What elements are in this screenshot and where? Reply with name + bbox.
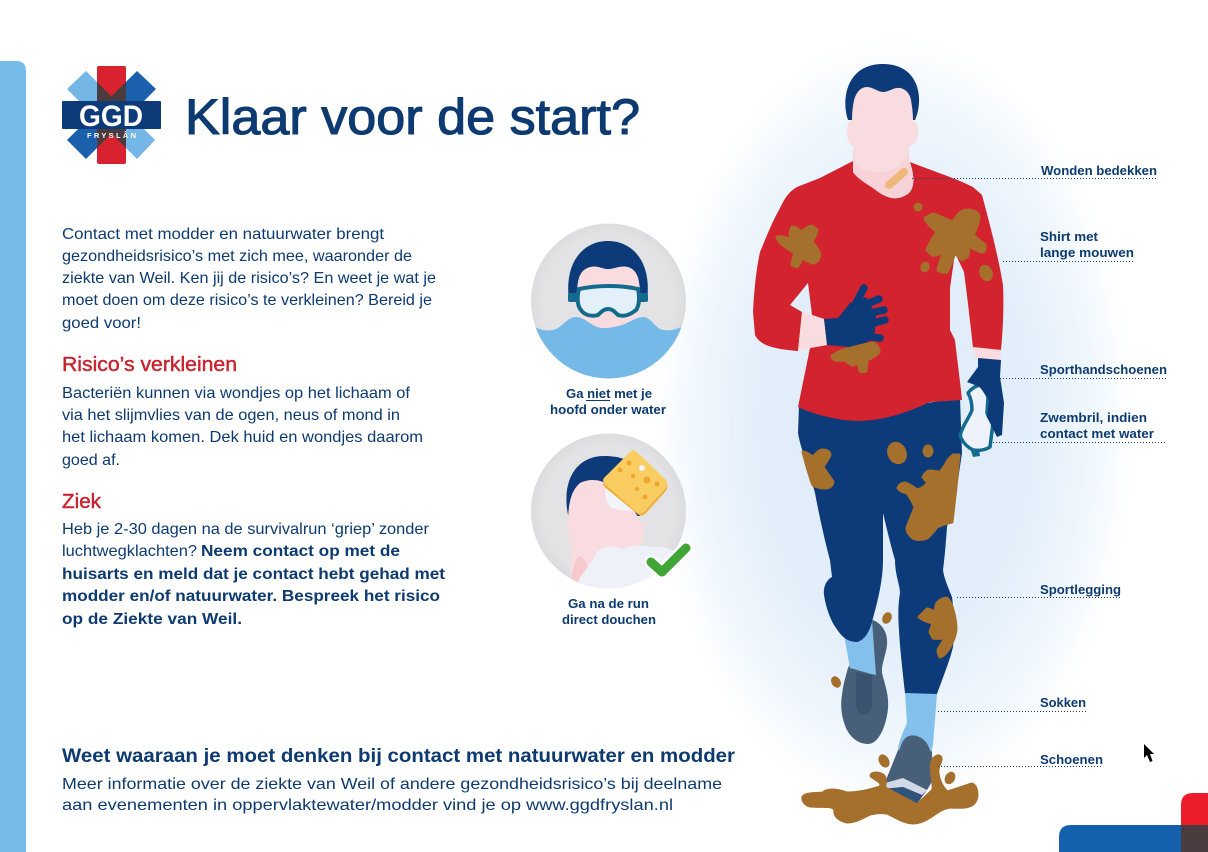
label: zwembril: contact met water [1040, 426, 1154, 441]
back sock [844, 620, 876, 675]
gloved hand [967, 358, 1004, 437]
logo: GGD Fryslan: GGD [79, 100, 143, 133]
label: shirt met lange mouwen: Shirt met [1040, 229, 1099, 244]
logo: GGD Fryslan: FRYSLÂN [87, 131, 136, 140]
label: zwembril: Zwembril, indien [1040, 410, 1147, 425]
bottom text block: Meer informatie over de ziekte van Weil of andere gezondheidsrisico’s bij deelname [62, 776, 722, 793]
shoe sole [882, 787, 922, 805]
back shoe [841, 620, 888, 744]
runner figure [753, 64, 1004, 823]
label: zwembril [990, 410, 1167, 442]
label: sokken: Sokken [1040, 695, 1086, 710]
caption: direct douchen [562, 596, 656, 627]
background glow behind runner [655, 35, 1135, 815]
bottom text block [62, 776, 722, 814]
mud on shirt [925, 210, 985, 272]
text block: risico's verkleinen [62, 385, 423, 469]
logo: GGD Fryslan [62, 66, 161, 164]
text block: ziek: op de Ziekte van Weil. [62, 611, 242, 628]
title: Klaar voor de start? [185, 89, 640, 145]
shirt torso and arms [753, 161, 1003, 421]
heading: risico's verkleinen: Risico’s verkleinen [62, 354, 237, 376]
swim goggles in hand [960, 385, 993, 450]
label: shirt met lange mouwen [1003, 229, 1134, 262]
caption: niet onder water: Ga niet met je [566, 386, 652, 401]
glove on chest [824, 288, 885, 347]
icon: showering head with sponge [531, 434, 690, 590]
text block: ziek [62, 521, 446, 628]
caption: direct douchen: direct douchen [562, 612, 656, 627]
text block: ziek: modder en/of natuurwater. Bespreek het risico [62, 588, 440, 605]
hair [845, 64, 919, 120]
plaster [889, 172, 904, 185]
intro text block: moet doen om deze risico’s te verkleinen? Bereid je [62, 292, 432, 309]
label: wonden bedekken: Wonden bedekken [1041, 163, 1157, 178]
neck [853, 150, 913, 198]
caption: niet onder water [550, 386, 666, 417]
intro text block: goed voor! [62, 315, 141, 332]
intro text block [62, 226, 436, 332]
caption: direct douchen: Ga na de run [568, 596, 649, 611]
text block: ziek: Heb je 2-30 dagen na de survivalrun ‘griep’ zonder [62, 521, 430, 538]
intro text block: ziekte van Weil. Ken jij de risico’s? En weet je wat je [62, 270, 436, 287]
label: schoenen: Schoenen [1040, 752, 1103, 767]
text block: ziek: huisarts en meld dat je contact hebt gehad met [62, 566, 446, 583]
skin cuffs [798, 312, 827, 351]
text block: ziek: Neem contact op met de [201, 543, 400, 560]
bottom text block: aan evenementen in oppervlaktewater/modder vind je op www.ggdfryslan.nl [62, 797, 673, 814]
label: shirt met lange mouwen: lange mouwen [1040, 245, 1134, 260]
label: sportlegging: Sportlegging [1040, 582, 1121, 597]
shoe stripe [882, 778, 927, 795]
text block: risico's verkleinen: goed af. [62, 452, 120, 469]
bottom heading: Weet waaraan je moet denken bij contact met natuurwater en modder [62, 745, 735, 767]
icon: mouse cursor [1144, 744, 1154, 762]
caption: niet onder water: hoofd onder water [550, 402, 666, 417]
corner blocks [1059, 793, 1208, 852]
text block: risico's verkleinen: het lichaam komen. Dek huid en wondjes daarom [62, 429, 423, 446]
front shoe [882, 735, 933, 804]
legging [798, 398, 962, 694]
front sock [898, 692, 937, 752]
intro text block: gezondheidsrisico’s met zich mee, waaronder de [62, 248, 412, 265]
text block: risico's verkleinen: via het slijmvlies van de ogen, neus of mond in [62, 407, 400, 424]
intro text block: Contact met modder en natuurwater brengt [62, 226, 385, 243]
mud on legs [803, 450, 833, 488]
label: sporthandschoenen: Sporthandschoenen [1040, 362, 1167, 377]
icon: head with goggles above water [531, 224, 686, 378]
mud below glove [832, 343, 879, 372]
left blue side bar [0, 61, 26, 852]
heading: ziek: Ziek [62, 491, 102, 513]
mud splash [803, 756, 977, 823]
text block: ziek: luchtwegklachten? [62, 543, 197, 560]
text block: risico's verkleinen: Bacteriën kunnen via wondjes op het lichaam of [62, 385, 411, 402]
face [847, 87, 918, 172]
icon: green check [651, 548, 686, 572]
